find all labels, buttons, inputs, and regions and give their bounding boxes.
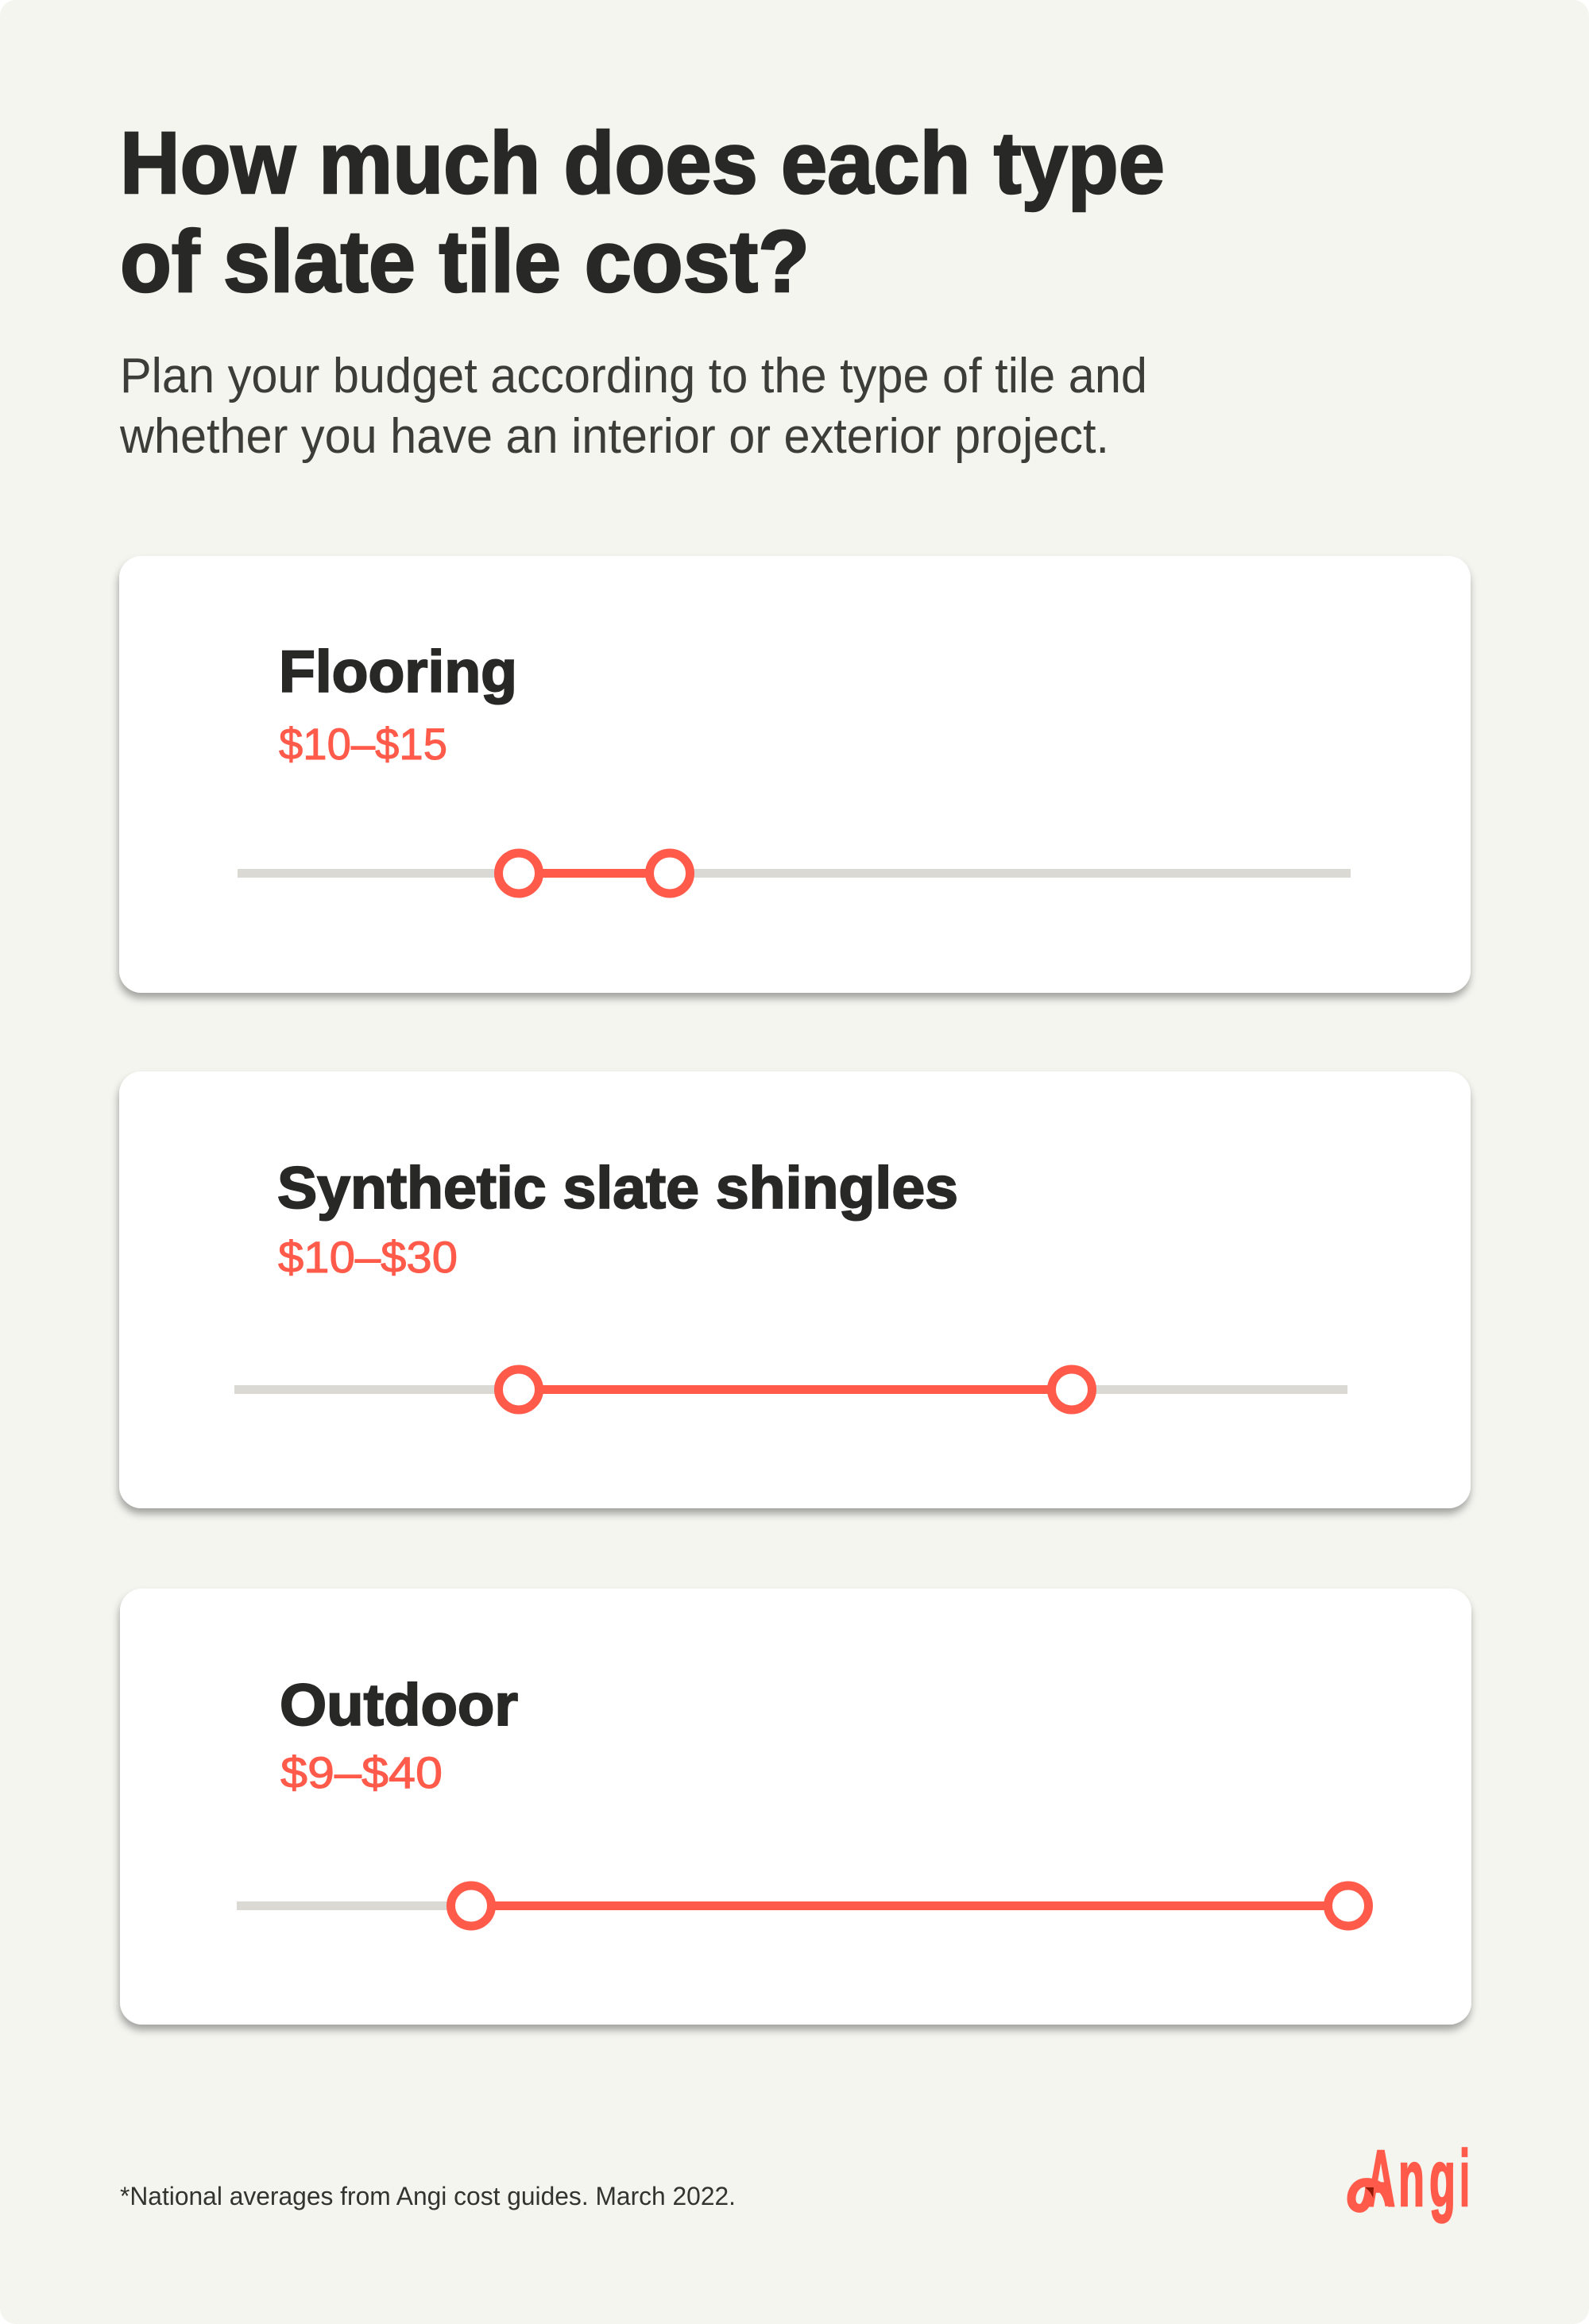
subtitle — [119, 349, 1147, 464]
price: flooring: $10–$15 — [279, 719, 447, 769]
title: of slate tile cost? — [120, 213, 810, 311]
range slider: outdoor — [237, 1886, 1368, 1926]
panel: outdoor — [120, 1589, 1471, 2025]
price: outdoor: $9–$40 — [280, 1747, 443, 1797]
subtitle: Plan your budget according to the type of tile and — [120, 349, 1147, 403]
range slider: flooring — [238, 853, 1351, 894]
title — [120, 114, 1165, 311]
logo: Angi: A — [1367, 2134, 1395, 2223]
subtitle: whether you have an interior or exterior project. — [119, 409, 1109, 464]
logo: Angi: n — [1398, 2134, 1425, 2223]
logo: Angi: g — [1429, 2134, 1456, 2223]
heading: outdoor: Outdoor — [280, 1672, 518, 1738]
panel: synthetic slate shingles — [119, 1071, 1471, 1508]
title: How much does each type — [120, 114, 1165, 212]
price: synthetic slate shingles: $10–$30 — [278, 1232, 458, 1282]
text: i — [1459, 2134, 1470, 2223]
logo: Angi — [1351, 2134, 1470, 2223]
footnote: *National averages from Angi cost guides. March 2022. — [120, 2182, 736, 2210]
heading: synthetic slate shingles: Synthetic slate shingles — [277, 1155, 958, 1221]
panel: flooring — [119, 556, 1471, 993]
heading: flooring: Flooring — [279, 639, 517, 705]
range slider: synthetic slate shingles — [234, 1369, 1347, 1410]
